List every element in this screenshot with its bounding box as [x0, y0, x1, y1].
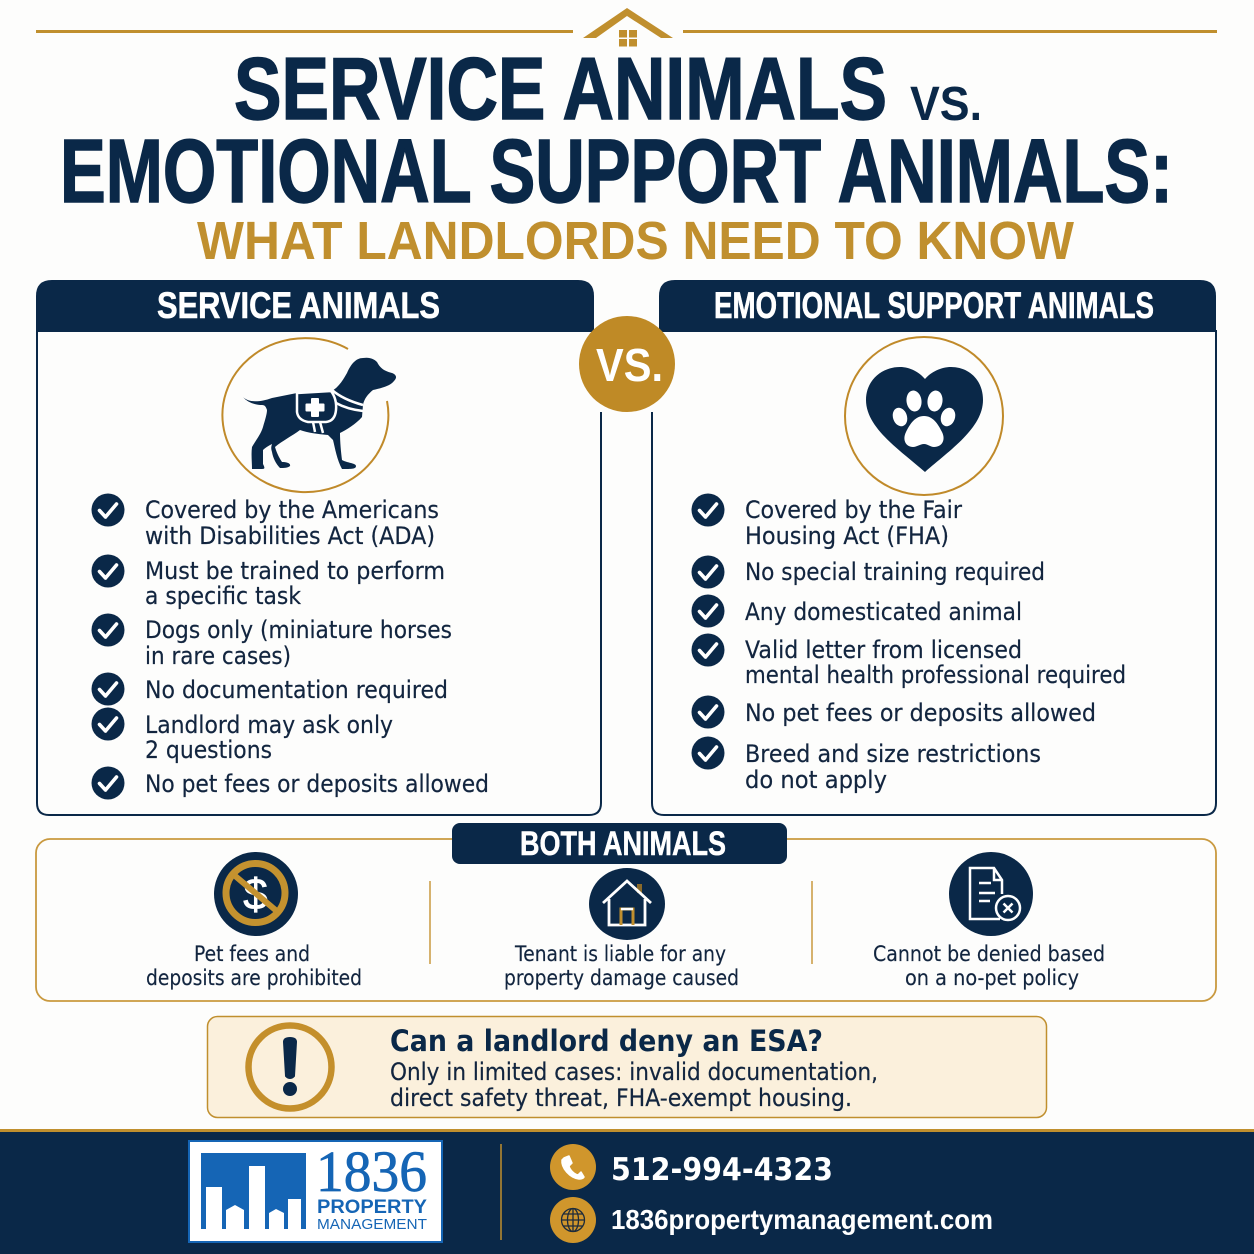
checklist: emotional support animals: Valid letter from licensed	[745, 636, 1022, 664]
panel header: service animals: SERVICE ANIMALS	[157, 285, 440, 326]
checklist: emotional support animals	[692, 494, 1126, 794]
callout text: Can a landlord deny an ESA?	[390, 1024, 823, 1058]
icon: paw in heart	[845, 337, 1003, 495]
checklist: service animals: 2 questions	[145, 736, 272, 764]
title: SERVICE ANIMALS	[234, 39, 887, 138]
checklist: emotional support animals: No special training required	[745, 558, 1045, 586]
checklist: service animals: Dogs only (miniature horses	[145, 616, 452, 644]
badge: VS	[579, 316, 675, 412]
icon: exclamation	[248, 1026, 332, 1108]
text: website: 1836propertymanagement.com	[611, 1204, 993, 1235]
callout text: Only in limited cases: invalid documentation,	[390, 1058, 878, 1086]
icon: house	[589, 868, 665, 940]
checklist: service animals: with Disabilities Act (ADA)	[145, 522, 435, 550]
subtitle: WHAT LANDLORDS NEED TO KNOW	[197, 211, 1074, 271]
icon: phone	[550, 1144, 596, 1190]
callout text	[390, 1024, 878, 1112]
text: pet fees: deposits are prohibited	[146, 966, 362, 990]
icon: no pet fees: $	[243, 870, 268, 919]
text: no-pet policy	[873, 942, 1105, 990]
text: pet fees	[146, 942, 362, 990]
text: tenant liable: Tenant is liable for any	[514, 942, 726, 966]
text: tenant liable	[504, 942, 739, 990]
checklist: emotional support animals: do not apply	[745, 766, 887, 794]
title	[60, 39, 1173, 222]
logo: 1836 property management: 1836	[316, 1139, 427, 1204]
checklist: emotional support animals: Any domesticated animal	[745, 598, 1022, 626]
checklist: service animals: Must be trained to perform	[145, 557, 445, 585]
panel: both animals	[36, 823, 1216, 1001]
text: tenant liable: property damage caused	[504, 966, 739, 990]
icon: globe	[550, 1197, 596, 1243]
text: phone number: 512-994-4323	[611, 1152, 833, 1188]
footer band	[0, 1129, 1254, 1254]
checklist: service animals: No documentation required	[145, 676, 448, 704]
icon: service dog in circle	[222, 338, 396, 492]
checklist: emotional support animals: No pet fees or deposits allowed	[745, 699, 1096, 727]
checklist: service animals: Covered by the Americans	[145, 496, 439, 524]
checklist: service animals: No pet fees or deposits allowed	[145, 770, 489, 798]
checklist: service animals	[92, 494, 489, 800]
checklist: emotional support animals: mental health professional required	[745, 661, 1126, 689]
checklist: emotional support animals: Housing Act (FHA)	[745, 522, 949, 550]
text: no-pet policy: Cannot be denied based	[873, 942, 1105, 966]
checklist: service animals: in rare cases)	[145, 642, 291, 670]
logo: 1836 property management: MANAGEMENT	[317, 1216, 427, 1233]
text: no-pet policy: on a no-pet policy	[905, 966, 1079, 990]
text: pet fees: Pet fees and	[194, 942, 310, 966]
checklist: service animals: a specific task	[145, 582, 301, 610]
panel: emotional support animals	[652, 280, 1216, 815]
heading: both animals: BOTH ANIMALS	[520, 825, 726, 863]
icon: document with x	[949, 852, 1033, 936]
badge: VS: VS.	[596, 339, 663, 391]
panel: service animals	[36, 280, 601, 815]
logo: 1836 property management	[189, 1139, 442, 1242]
title: VS.	[910, 78, 982, 131]
callout text: direct safety threat, FHA-exempt housing.	[390, 1084, 852, 1112]
checklist: service animals: Landlord may ask only	[145, 711, 393, 739]
logo: 1836 property management: PROPERTY	[317, 1197, 427, 1218]
icon: house roof logo	[583, 8, 673, 46]
icon: no pet fees	[214, 852, 298, 936]
checklist: emotional support animals: Breed and size restrictions	[745, 740, 1041, 768]
panel header: service animals	[36, 280, 594, 332]
panel header: emotional support animals	[659, 280, 1216, 332]
checklist: emotional support animals: Covered by the Fair	[745, 496, 962, 524]
callout: can a landlord deny	[208, 1016, 1046, 1118]
